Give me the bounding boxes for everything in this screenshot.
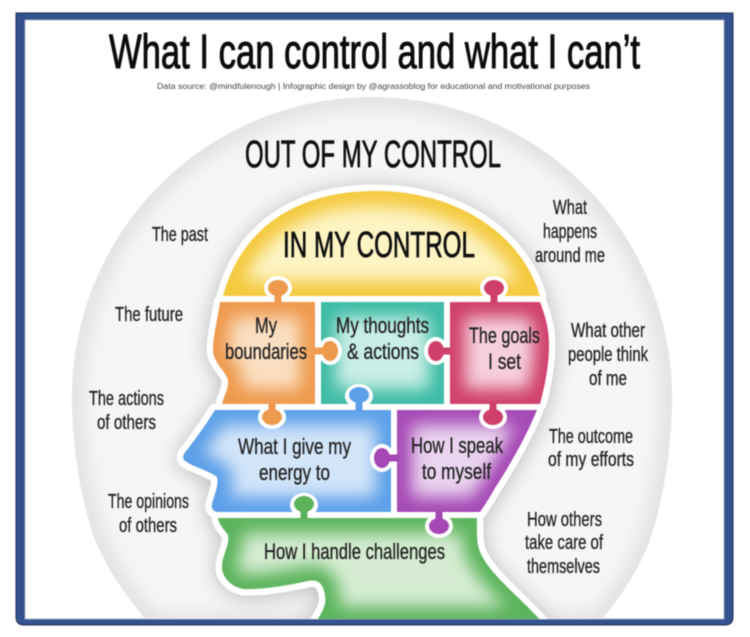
heading: out of my control: OUT OF MY CONTROL	[245, 134, 501, 176]
piece: how I speak to myself (purple)	[370, 410, 537, 538]
piece: my thoughts and actions (teal)	[321, 302, 444, 404]
subtitle: data source: Data source: @mindfulenough | Infographic design by @agrassoblog for educational and motivational purposes	[157, 81, 590, 91]
label: what other people think of me: What other	[571, 320, 645, 342]
label: how others take care of themselves: themselves	[527, 556, 600, 578]
panel: out of my control circle	[72, 97, 672, 625]
piece: in my control (yellow)	[223, 191, 540, 296]
label: what other people think of me: people think	[568, 344, 649, 366]
label: what happens around me: around me	[535, 245, 605, 267]
label: the outcome of my efforts	[548, 426, 634, 471]
piece: how I handle challenges (green)	[218, 493, 542, 622]
label: what happens around me: happens	[543, 221, 597, 243]
label: what happens around me	[535, 197, 605, 267]
piece: my thoughts and actions (teal): & actions	[347, 339, 419, 364]
piece: what I give my energy to (blue)	[183, 384, 391, 512]
label: the actions of others	[89, 388, 164, 434]
piece: my boundaries (orange): boundaries	[225, 339, 307, 364]
piece: my thoughts and actions (teal): My thoughts	[336, 313, 429, 338]
piece: my boundaries (orange)	[213, 276, 342, 429]
label: the outcome of my efforts: The outcome	[549, 426, 633, 448]
piece: how I speak to myself (purple): How I speak	[411, 433, 504, 458]
label: how others take care of themselves: How others	[527, 509, 602, 531]
piece: the goals I set (pink): I set	[488, 349, 521, 374]
label: how others take care of themselves	[525, 509, 603, 578]
piece: in my control (yellow): IN MY CONTROL	[283, 224, 475, 265]
label: what happens around me: What	[553, 197, 587, 219]
label: the actions of others: The actions	[89, 388, 164, 410]
piece: my boundaries (orange): My	[255, 313, 277, 338]
label: the future: The future	[115, 304, 183, 326]
label: how others take care of themselves: take care of	[525, 532, 603, 554]
panel: head puzzle	[183, 191, 549, 622]
piece: the goals I set (pink)	[424, 276, 549, 429]
label: what other people think of me: of me	[589, 368, 627, 390]
label: the past: The past	[152, 224, 208, 246]
piece: the goals I set (pink): The goals	[469, 323, 540, 348]
piece: how I handle challenges (green): How I handle challenges	[264, 539, 445, 564]
label: the opinions of others	[108, 491, 189, 537]
piece: how I speak to myself (purple): to myself	[422, 459, 492, 484]
label: the opinions of others: of others	[119, 515, 177, 537]
piece: what I give my energy to (blue): What I give my	[238, 434, 351, 459]
label: the outcome of my efforts: of my efforts	[548, 449, 634, 471]
label: the actions of others: of others	[97, 412, 156, 434]
label: the opinions of others: The opinions	[108, 491, 189, 513]
label: what other people think of me	[568, 320, 649, 390]
piece: what I give my energy to (blue): energy to	[259, 460, 330, 485]
